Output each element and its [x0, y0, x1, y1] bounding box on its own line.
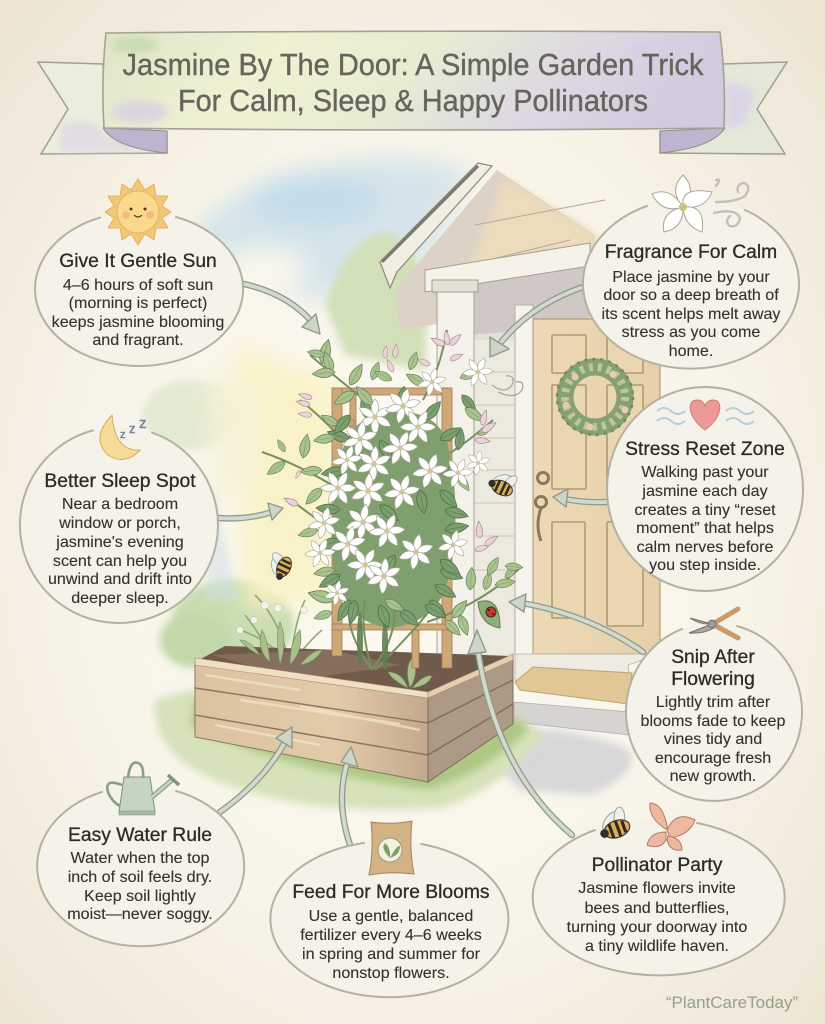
- roof trim: [380, 163, 492, 288]
- body text: keeps jasmine blooming: [52, 313, 224, 331]
- body text: bees and butterflies,: [585, 899, 729, 917]
- arrow: water: [220, 727, 292, 812]
- watermark: “PlantCareToday”: [666, 993, 798, 1012]
- panel: easy water rule: [37, 763, 244, 946]
- body text: (morning is perfect): [69, 294, 207, 312]
- bee on left: [263, 549, 295, 582]
- panel: fragrance for calm: [583, 175, 799, 369]
- body text: and fragrant.: [92, 331, 184, 349]
- background tree: [142, 232, 428, 670]
- body text: deeper sleep.: [71, 589, 169, 607]
- panel: better sleep: [20, 415, 218, 623]
- arrow: snip: [509, 594, 643, 652]
- body text: nonstop flowers.: [332, 964, 450, 982]
- porch column: [437, 283, 474, 655]
- step: [515, 654, 660, 680]
- jasmine plant: [262, 330, 523, 670]
- front face: [195, 662, 428, 782]
- arrows: [218, 284, 643, 845]
- title banner: [38, 31, 787, 154]
- body text: Jasmine flowers invite: [578, 879, 736, 897]
- body text: blooms fade to keep: [641, 712, 786, 730]
- body text: [52, 276, 224, 349]
- body text: Keep soil lightly: [84, 887, 197, 905]
- low herbs: [236, 601, 432, 688]
- heading: Easy Water Rule: [68, 825, 212, 846]
- body text: a tiny wildlife haven.: [585, 937, 729, 955]
- icon: butterfly: [647, 803, 695, 850]
- wreath: [557, 359, 633, 435]
- rim: [195, 658, 428, 698]
- body text: new growth.: [670, 767, 756, 785]
- body text: [634, 463, 776, 574]
- arrow: fragrance: [490, 287, 583, 357]
- body text: jasmine each day: [641, 482, 769, 500]
- body text: Water when the top: [71, 849, 210, 867]
- body text: calm nerves before: [637, 538, 773, 556]
- body text: moist—never soggy.: [67, 905, 213, 923]
- heading: [671, 647, 755, 690]
- icon: moon and zzz: z: [120, 429, 126, 441]
- icon: moon and zzz: z: [139, 415, 146, 432]
- leaves: [265, 338, 523, 638]
- title: For Calm, Sleep & Happy Pollinators: [178, 84, 648, 118]
- icon: bee: [593, 804, 634, 843]
- icon: watering can: [107, 763, 179, 815]
- ribbon tails: [38, 62, 167, 154]
- heading: Flowering: [671, 669, 755, 690]
- sun rays: [205, 345, 340, 610]
- small plants in bed: [240, 595, 325, 665]
- title: Jasmine By The Door: A Simple Garden Trick: [122, 48, 704, 82]
- body text: its scent helps melt away: [602, 305, 781, 323]
- body text: vines tidy and: [664, 730, 762, 748]
- gable wall: [395, 170, 595, 330]
- body text: fertilizer every 4–6 weeks: [300, 926, 482, 944]
- body text: inch of soil feels dry.: [68, 868, 212, 886]
- stems: [262, 330, 520, 670]
- heading: Snip After: [671, 647, 755, 668]
- garden scene: [142, 159, 660, 810]
- body text: [641, 693, 786, 785]
- panel: snip after flowering: [626, 609, 802, 801]
- body text: in spring and summer for: [302, 945, 481, 963]
- arrow: sun: [244, 284, 320, 334]
- icon: fertilizer bag: [369, 821, 414, 875]
- icon: heart and waves: [657, 400, 754, 430]
- ribbon folds: [103, 128, 167, 153]
- body text: encourage fresh: [655, 749, 771, 767]
- scent swirls: [492, 376, 523, 396]
- body text: Lightly trim after: [656, 693, 771, 711]
- body text: unwind and drift into: [48, 570, 192, 588]
- body text: you step inside.: [649, 556, 761, 574]
- heading: Better Sleep Spot: [44, 471, 196, 492]
- flowers: [300, 352, 498, 608]
- body text: door so a deep breath of: [603, 286, 779, 304]
- body text: [67, 849, 213, 923]
- body text: home.: [669, 342, 713, 360]
- icon: sun: [105, 179, 171, 245]
- body text: window or porch,: [58, 514, 181, 532]
- body text: moment” that helps: [636, 519, 774, 537]
- body text: stress as you come: [622, 323, 760, 341]
- heading: Feed For More Blooms: [292, 882, 490, 903]
- title: [122, 48, 704, 118]
- body text: [567, 879, 747, 955]
- foliage mass: [332, 412, 456, 628]
- heading: Pollinator Party: [592, 855, 723, 876]
- arrow: sleep: [218, 503, 283, 520]
- arrow: feed: [341, 747, 358, 845]
- sky wash: [190, 159, 470, 300]
- panel: stress reset: [607, 387, 803, 591]
- soil: [195, 646, 513, 697]
- wall and porch ceiling: [470, 285, 590, 655]
- body text: [48, 495, 192, 607]
- body text: jasmine's evening: [55, 533, 184, 551]
- planter box: [195, 646, 513, 782]
- panel: gentle sun: [35, 179, 243, 366]
- body text: [300, 907, 482, 982]
- buds: [283, 330, 500, 552]
- heading: Give It Gentle Sun: [59, 251, 217, 272]
- icon: jasmine flower and swirl: [652, 175, 748, 232]
- icon: moon and zzz: z: [129, 421, 136, 436]
- body text: 4–6 hours of soft sun: [63, 276, 213, 294]
- bee near door: [486, 466, 521, 500]
- ribbon main: [103, 31, 724, 130]
- body text: scent can help you: [53, 552, 187, 570]
- door frame: [515, 305, 533, 655]
- arrow: pollinator: [468, 630, 572, 835]
- door: [533, 319, 660, 654]
- body text: [602, 268, 781, 360]
- body text: turning your doorway into: [567, 918, 747, 936]
- right face: [428, 656, 513, 782]
- panel: feed for more blooms: [270, 821, 510, 997]
- path and lawn: [155, 690, 632, 810]
- trellis: [332, 388, 452, 668]
- body text: creates a tiny “reset: [634, 501, 776, 519]
- heading: Fragrance For Calm: [605, 242, 777, 263]
- door handle: [536, 472, 548, 541]
- house: [380, 163, 660, 735]
- perimeter foliage: [326, 427, 352, 445]
- panel: pollinator party: [533, 803, 785, 975]
- fascia: [425, 243, 590, 292]
- lower step: [514, 702, 630, 735]
- body text: Use a gentle, balanced: [309, 907, 473, 925]
- icon: moon and zzz: [100, 415, 146, 459]
- heading: Stress Reset Zone: [625, 439, 785, 460]
- body text: Near a bedroom: [62, 495, 178, 513]
- icon: pruners: [689, 609, 738, 638]
- doormat: [515, 667, 632, 704]
- arrow: stress: [553, 489, 607, 507]
- body text: Place jasmine by your: [612, 268, 770, 286]
- body text: Walking past your: [641, 463, 769, 481]
- leaf with ladybug: [478, 601, 500, 628]
